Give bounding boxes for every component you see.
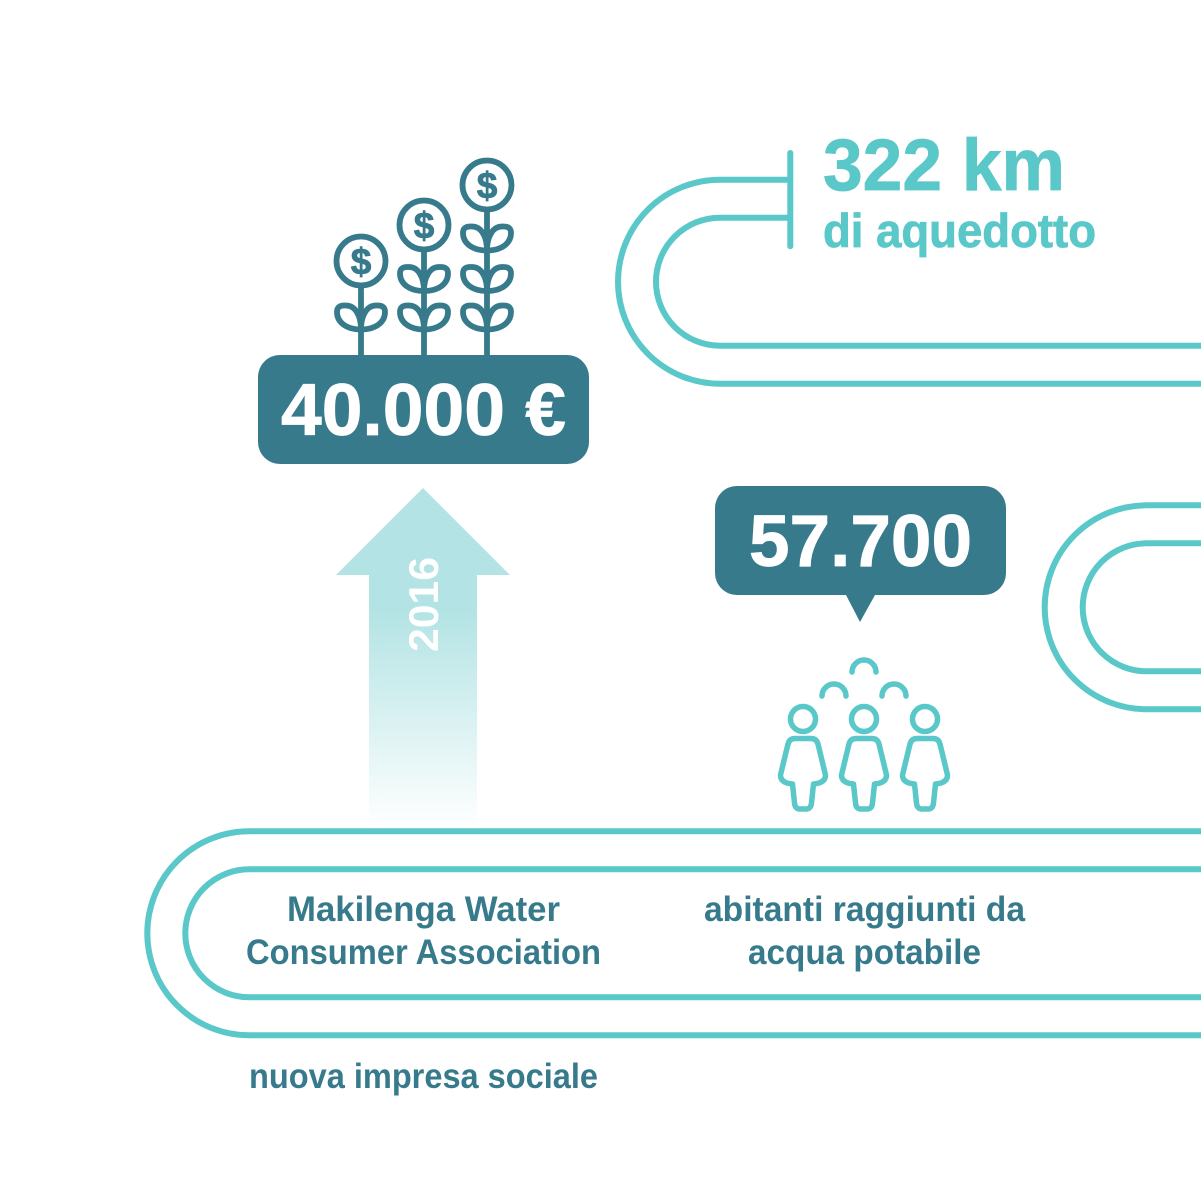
callout: 40.000 euro bbox=[258, 355, 589, 464]
heading: 322 km di aquedotto bbox=[823, 125, 1096, 257]
text: abitanti raggiunti da acqua potabile bbox=[704, 890, 1026, 972]
plant 3: $ bbox=[477, 165, 498, 206]
icon: money plants bbox=[336, 160, 512, 356]
plant 2 bbox=[400, 200, 448, 356]
callout: 57.700: 57.700 bbox=[749, 501, 972, 582]
arrow: 2016: 2016 bbox=[400, 557, 447, 652]
callout: 57.700 bbox=[715, 486, 1006, 622]
icon: people bbox=[780, 660, 948, 809]
heading: 322 km di aquedotto: 322 km bbox=[823, 125, 1065, 206]
text: abitanti raggiunti da acqua potabile: acqua potabile bbox=[748, 933, 981, 972]
arrow: 2016 bbox=[336, 488, 510, 828]
pipe: top right bbox=[618, 153, 1201, 384]
text: Makilenga Water Consumer Association bbox=[246, 890, 601, 972]
text: nuova impresa sociale: nuova impresa sociale bbox=[249, 1057, 598, 1096]
plant 1 bbox=[336, 236, 386, 356]
text: Makilenga Water Consumer Association: Makilenga Water bbox=[287, 890, 560, 929]
plant 2: $ bbox=[414, 205, 435, 246]
text: abitanti raggiunti da acqua potabile: abitanti raggiunti da bbox=[704, 890, 1026, 929]
plant 1: $ bbox=[351, 241, 372, 282]
pipe: bottom bbox=[147, 831, 1201, 1035]
pipe: middle right bbox=[1045, 505, 1201, 709]
text: Makilenga Water Consumer Association: Consumer Association bbox=[246, 933, 601, 972]
heading: 322 km di aquedotto: di aquedotto bbox=[823, 204, 1096, 257]
plant 3 bbox=[462, 160, 512, 356]
callout: 40.000 euro: 40.000 € bbox=[281, 370, 566, 451]
